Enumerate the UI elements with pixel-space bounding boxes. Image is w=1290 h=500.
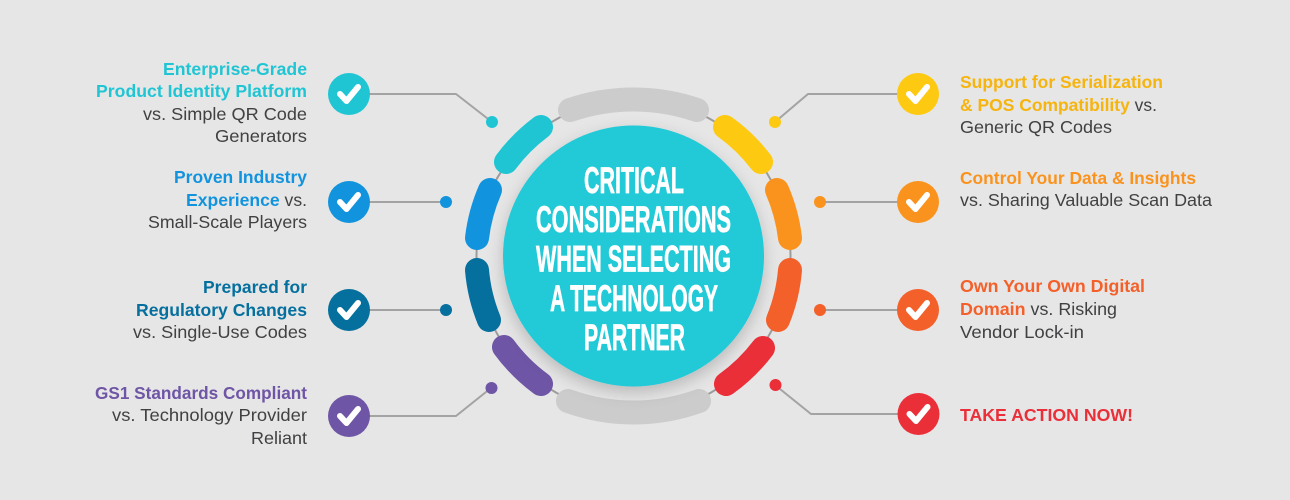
icon: check: [897, 181, 939, 223]
connector: [820, 309, 918, 311]
text: proven experience: Experience vs.: [186, 190, 307, 210]
dot: [770, 379, 782, 391]
text: digital domain: Domain vs. Risking: [960, 299, 1117, 319]
connector: [820, 201, 918, 203]
connector: [775, 385, 918, 414]
text: proven experience: Small-Scale Players: [148, 212, 307, 232]
text: regulatory changes: [133, 277, 307, 342]
item 1: enterprise-grade: [96, 59, 498, 146]
text: digital domain: Own Your Own Digital: [960, 276, 1145, 296]
text: enterprise-grade: Product Identity Platform: [96, 81, 307, 101]
item 2: proven experience: [148, 167, 452, 232]
ring segment: teal: [506, 127, 541, 162]
connector: [775, 94, 918, 122]
text: enterprise-grade: Generators: [215, 126, 307, 146]
text: digital domain: Vendor Lock-in: [960, 322, 1084, 342]
text: gs1 standards: vs. Technology Provider: [112, 405, 307, 425]
text: serialization: Support for Serialization: [960, 72, 1163, 92]
title: [536, 160, 731, 358]
connector: [349, 388, 491, 416]
title: A TECHNOLOGY: [550, 278, 718, 319]
icon: check: [897, 73, 939, 115]
text: enterprise-grade: vs. Simple QR Code: [143, 104, 307, 124]
item 3: regulatory changes: [133, 277, 452, 342]
dot: [440, 304, 452, 316]
title: CRITICAL: [584, 160, 684, 201]
central circle: [503, 126, 764, 386]
dot: [814, 196, 826, 208]
connector: [349, 309, 446, 311]
text: serialization: [960, 72, 1163, 137]
text: gs1 standards: GS1 Standards Compliant: [95, 383, 307, 403]
dot: [769, 116, 781, 128]
text: enterprise-grade: Enterprise-Grade: [163, 59, 307, 79]
text: regulatory changes: Prepared for: [203, 277, 307, 297]
ring segment: dark blue: [477, 270, 489, 320]
segmented ring: [477, 99, 790, 413]
text: data and insights: [960, 168, 1212, 210]
thin ring behind segments: [476, 99, 790, 413]
connector: [349, 94, 492, 122]
ring segment: bottom grey: [568, 401, 699, 413]
text: data and insights: vs. Sharing Valuable Scan Data: [960, 190, 1212, 210]
text: gs1 standards: Reliant: [251, 428, 307, 448]
text: digital domain: [960, 276, 1145, 342]
ring segment: top grey: [570, 99, 697, 110]
text: proven experience: Proven Industry: [174, 167, 307, 187]
ring segment: orange: [777, 190, 790, 238]
item 4: gs1 standards: [95, 382, 498, 448]
dot: [814, 304, 826, 316]
text: serialization: & POS Compatibility vs.: [960, 95, 1157, 115]
item 6: data and insights: [814, 168, 1212, 223]
icon: check: [328, 181, 370, 223]
icon: check: [328, 395, 370, 437]
icon: check: [328, 73, 370, 115]
connector: [349, 201, 446, 203]
icon: check: [898, 393, 940, 435]
icon: check: [328, 289, 370, 331]
dot: [486, 116, 498, 128]
dot: [486, 382, 498, 394]
title: PARTNER: [584, 317, 685, 358]
text: proven experience: [148, 167, 307, 232]
text: regulatory changes: Regulatory Changes: [136, 300, 307, 320]
text: regulatory changes: vs. Single-Use Codes: [133, 322, 307, 342]
text: serialization: Generic QR Codes: [960, 117, 1112, 137]
dot: [440, 196, 452, 208]
text: take action: TAKE ACTION NOW!: [960, 405, 1133, 425]
item 5: serialization: [769, 72, 1163, 137]
icon: check: [897, 289, 939, 331]
ring segment: blue: [477, 190, 490, 238]
item 8: take action: [770, 379, 1133, 435]
ring segment: red: [726, 348, 763, 384]
ring segment: purple: [504, 347, 541, 384]
ring segment: yellow: [725, 127, 761, 162]
title: CONSIDERATIONS: [536, 199, 731, 240]
text: data and insights: Control Your Data & Insights: [960, 168, 1196, 188]
ring segment: red-orange: [778, 270, 790, 320]
text: enterprise-grade: [96, 59, 307, 146]
title: WHEN SELECTING: [536, 238, 731, 280]
text: gs1 standards: [95, 383, 307, 448]
item 7: digital domain: [814, 276, 1145, 342]
